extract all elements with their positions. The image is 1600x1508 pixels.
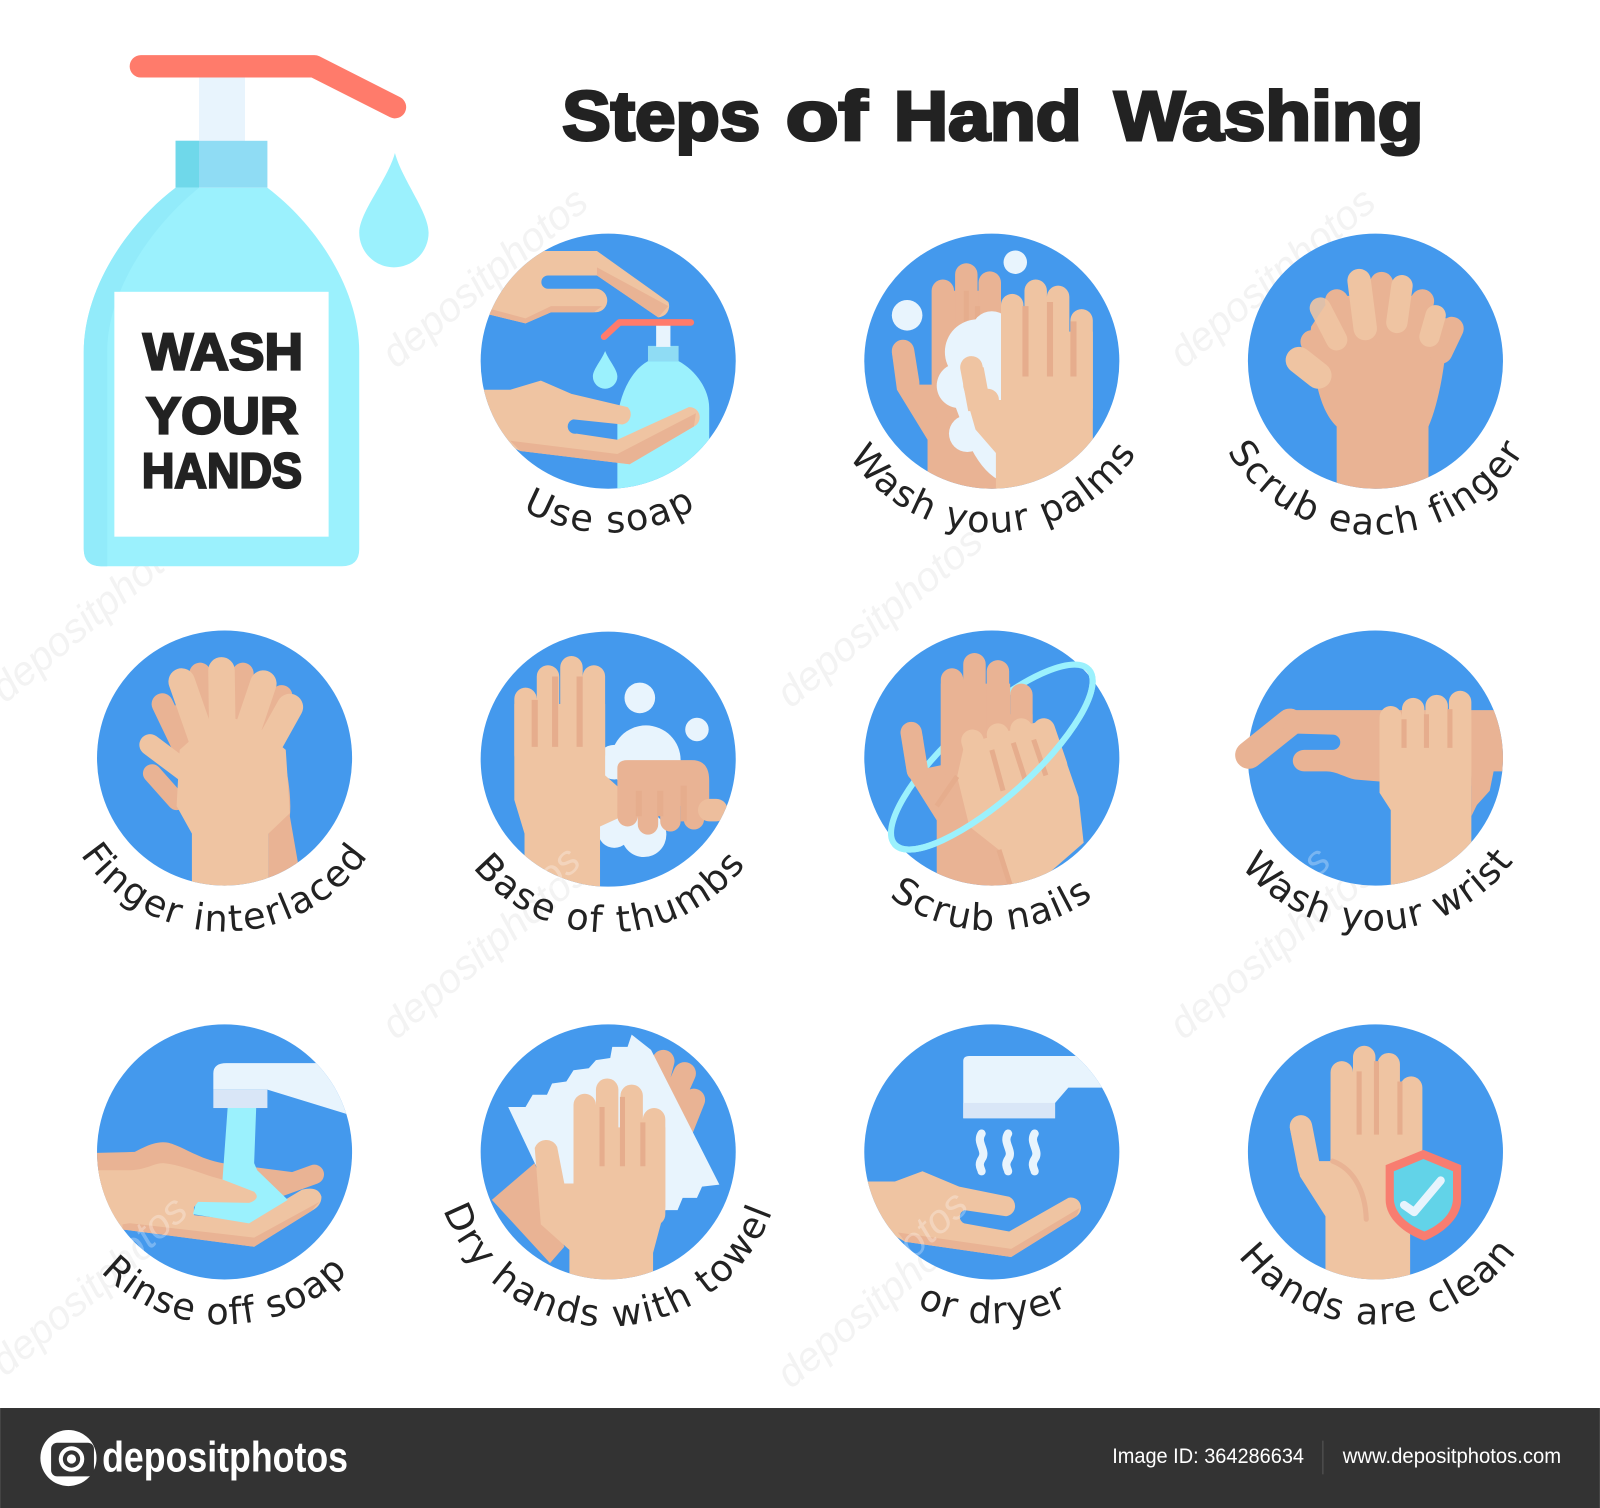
watermark overlay	[108, 836, 1339, 1272]
watermark layer: depositphotos	[767, 1198, 991, 1397]
icon: soap pump bottle	[84, 66, 429, 566]
label text: WASH	[143, 323, 303, 381]
logo wordmark: depositphotos	[102, 1433, 348, 1481]
label: Wash your wrist	[1246, 848, 1513, 936]
icon: hand gripping wrist	[1248, 631, 1510, 898]
icon: fist on thumb base	[481, 632, 736, 898]
shield with check	[1386, 1150, 1461, 1241]
panel: base of thumbs	[474, 632, 742, 932]
website: www.depositphotos.com	[1342, 1444, 1561, 1468]
bottle body	[84, 188, 359, 566]
icon: faucet and hand	[92, 1024, 357, 1279]
collar	[176, 141, 267, 188]
icon: hands with ring	[864, 631, 1119, 898]
panel: scrub nails	[864, 630, 1120, 931]
label: Use soap	[528, 487, 692, 533]
icon: hands and soap bottle	[480, 234, 736, 495]
watermark layer: depositphotos	[372, 178, 596, 376]
panel: hands are clean	[1240, 1024, 1514, 1325]
title: Hand	[894, 77, 1082, 155]
label: Scrub each finger	[1229, 440, 1520, 535]
icon: fan of fingers	[1248, 234, 1503, 490]
label: Finger interlaced	[82, 841, 366, 932]
label text	[142, 323, 303, 499]
label	[114, 292, 329, 537]
panel: rinse off soap	[97, 1024, 352, 1325]
panel: dry hands with towel	[444, 1024, 771, 1326]
bottle shade	[84, 188, 199, 566]
watermark layer: depositphotos	[372, 849, 596, 1048]
icon: palms with foam	[864, 234, 1119, 490]
icon: clean hand with shield	[1248, 1024, 1503, 1286]
icon: interlaced fingers	[97, 631, 352, 898]
panel: wash your palms	[854, 234, 1134, 535]
watermark layer: depositphotos	[767, 517, 991, 716]
panel: or dryer	[864, 1024, 1120, 1330]
icon: hand dryer and hand	[857, 1024, 1119, 1279]
label: Scrub nails	[892, 878, 1090, 931]
foam	[936, 311, 1001, 478]
title	[562, 77, 1423, 155]
water stream	[193, 1108, 288, 1223]
label: Dry hands with towel	[444, 1202, 771, 1326]
thumb	[92, 1163, 257, 1224]
watermark layer: depositphotos	[1160, 849, 1384, 1048]
label: or dryer	[921, 1286, 1062, 1330]
label text: HANDS	[142, 445, 302, 499]
label: Base of thumbs	[474, 852, 742, 932]
image id: Image ID: 364286634	[1112, 1444, 1304, 1468]
label: Hands are clean	[1240, 1241, 1514, 1325]
title: Washing	[1114, 77, 1423, 155]
watermark overlay: os	[526, 836, 589, 899]
label: Rinse off soap	[102, 1254, 344, 1325]
panel: scrub each finger	[1229, 234, 1520, 535]
pump head	[141, 66, 395, 107]
watermark layer: depositphotos	[1160, 178, 1384, 376]
label text: YOUR	[146, 388, 298, 446]
soap drop	[359, 153, 429, 267]
panel: use soap	[480, 234, 736, 533]
watermark layer	[0, 178, 1384, 1397]
divider	[1322, 1441, 1323, 1474]
watermark overlay: otos	[108, 1186, 196, 1272]
title: Steps	[562, 77, 760, 155]
title: of	[786, 77, 868, 155]
logo: camera badge	[40, 1430, 97, 1486]
pump stem	[199, 76, 245, 143]
lower palm and finger	[92, 1189, 321, 1247]
watermark overlay: otos	[888, 1181, 977, 1267]
panel: finger interlaced	[82, 630, 366, 932]
watermark overlay: os	[1276, 836, 1339, 899]
footer bar	[0, 1408, 1600, 1508]
label: Wash your palms	[854, 440, 1134, 535]
panel: wash your wrist	[1235, 630, 1513, 936]
icon: hands and towel	[481, 1024, 736, 1286]
